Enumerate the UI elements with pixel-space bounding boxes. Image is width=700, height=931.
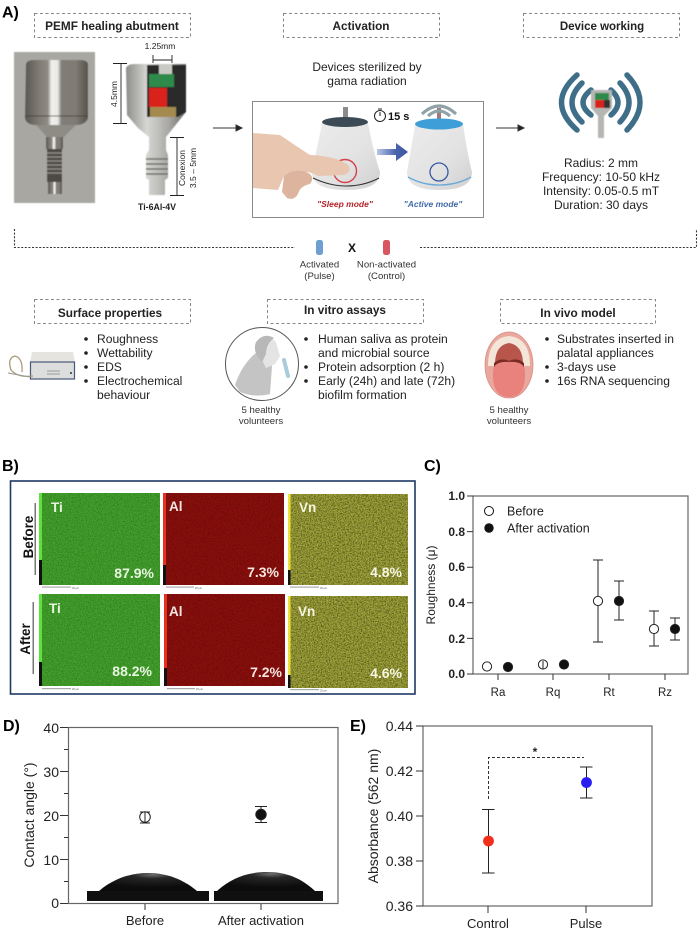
icon: process arrow [377, 143, 408, 161]
diagram: abutment cross-section with dimensions: 1.25mm [145, 41, 175, 51]
x axis labels [126, 913, 304, 928]
icon: non-activated device [383, 240, 390, 255]
map: Ti after: 88.2% [112, 663, 153, 679]
chart: absorbance [365, 718, 652, 931]
section label B: B) [2, 458, 19, 475]
label: in vivo volunteers [487, 405, 531, 427]
heading: Device working [524, 14, 680, 38]
heading: Surface properties [34, 300, 190, 324]
map: Al after [164, 594, 285, 691]
panel: activation illustration [252, 102, 484, 218]
section label E: E) [350, 718, 366, 735]
y axis ticks: 0.40 [386, 808, 413, 824]
x axis labels: Rq [546, 687, 560, 699]
label: in vitro volunteers: 5 healthy [242, 405, 281, 416]
map: Vn before: 4.8% [370, 564, 403, 580]
y axis ticks: 30 [43, 764, 59, 780]
label: in vivo volunteers: volunteers [487, 416, 531, 427]
y axis ticks: 40 [43, 720, 59, 736]
chart: contact angle [21, 720, 338, 928]
y axis ticks: 0.0 [448, 667, 465, 681]
label: after row [18, 602, 34, 674]
map: Vn after [288, 596, 408, 692]
label: activated: (Pulse) [304, 271, 335, 282]
error bars and points [482, 560, 680, 672]
y axis ticks: 0.44 [386, 718, 413, 734]
label: in vivo volunteers: 5 healthy [490, 405, 529, 416]
heading: In vivo model: In vivo model [540, 306, 616, 320]
y axis ticks: 0.4 [448, 596, 465, 610]
text: device parameters: Duration: 30 days [554, 198, 648, 212]
heading: Activation [284, 14, 440, 38]
significance bracket [488, 745, 584, 799]
x axis labels: Rz [658, 687, 672, 699]
label: activated [300, 260, 339, 282]
list: surface properties: Wettability [97, 346, 154, 360]
y axis ticks: 0.36 [386, 898, 413, 914]
text: device parameters: Intensity: 0.05-0.5 mT [543, 184, 660, 198]
label: sleep mode: "Sleep mode" [317, 199, 374, 209]
x axis labels: Pulse [570, 916, 602, 931]
heading: PEMF healing abutment: PEMF healing abutment [45, 19, 179, 33]
icon: open mouth [485, 332, 533, 398]
text: sterilization note [312, 60, 422, 88]
list: in vitro assays: Early (24h) and late (72h) [318, 374, 455, 388]
diagram: abutment cross-section with dimensions: 3.5 – 5mm [188, 148, 198, 188]
icon: device emitting waves [562, 75, 640, 138]
list: in vivo model: palatal appliances [557, 346, 654, 360]
label: before row: Before [21, 515, 36, 558]
heading: Activation: Activation [332, 19, 390, 33]
icon: volunteer collecting saliva [226, 328, 298, 400]
map: Ti before: 87.9% [114, 565, 155, 581]
list: surface properties: EDS [97, 360, 122, 374]
droplet image: after activation [214, 872, 323, 901]
y axis ticks [386, 718, 413, 914]
text: device parameters: Radius: 2 mm [564, 156, 638, 170]
list: surface properties: Electrochemical [97, 374, 182, 388]
map: Ti before [39, 493, 160, 590]
map: Vn after: Vn [298, 604, 315, 619]
legend: Before [507, 504, 544, 518]
label: non-activated: Non-activated [357, 260, 416, 270]
heading: In vitro assays: In vitro assays [304, 303, 386, 317]
pulse point [580, 767, 592, 798]
label: non-activated [357, 260, 416, 282]
map: Al before: Al [169, 499, 182, 514]
arrow: abutment to activation [213, 125, 242, 131]
map: Ti after: 25 µm [72, 688, 79, 691]
map: Al after: Al [169, 604, 182, 619]
x axis labels [467, 916, 602, 931]
x axis labels [491, 687, 672, 699]
map: Ti after [39, 594, 160, 691]
y axis ticks: 0.2 [448, 632, 465, 646]
timer label: 15 s [388, 111, 409, 123]
y axis ticks: 20 [43, 808, 59, 824]
label: non-activated: (Control) [368, 271, 405, 282]
x axis labels: Control [467, 916, 509, 931]
y axis ticks: 1.0 [448, 489, 465, 503]
map: Vn after: 4.6% [370, 665, 403, 681]
y axis ticks [448, 489, 465, 681]
icon: surface analysis instrument [8, 352, 75, 379]
list: in vitro assays [304, 332, 455, 402]
heading: Surface properties: Surface properties [58, 306, 163, 320]
map: Ti after: Ti [49, 601, 61, 616]
diagram: abutment cross-section with dimensions: Conexion [177, 150, 187, 186]
icon: active mode device [407, 106, 472, 190]
heading: Device working: Device working [560, 21, 644, 33]
versus mark: X [348, 241, 356, 255]
y axis ticks [43, 720, 59, 911]
map: Al before: 25 µm [195, 587, 202, 590]
map: Al before [163, 493, 284, 590]
text: sterilization note: gama radiation [327, 74, 407, 88]
y axis ticks: 10 [43, 852, 59, 868]
y axis ticks: 0.42 [386, 763, 413, 779]
map: Vn before: Vn [299, 500, 316, 515]
map: Ti before: 25 µm [72, 587, 79, 590]
heading: In vivo model [500, 300, 656, 324]
list: in vivo model: 3-days use [557, 360, 616, 374]
legend [484, 504, 590, 536]
legend: After activation [507, 522, 590, 536]
timer label [374, 109, 409, 123]
list: surface properties [84, 332, 182, 402]
text: device parameters [542, 156, 660, 212]
control point [482, 810, 494, 873]
x axis labels: After activation [218, 913, 304, 928]
text: device parameters: Frequency: 10-50 kHz [542, 170, 660, 184]
map: Vn after: 25 µm [320, 690, 327, 692]
label: after row: After [18, 623, 33, 655]
map: Vn before: 25 µm [320, 587, 327, 590]
significance bracket: * [533, 745, 538, 759]
map: Al after: 25 µm [196, 688, 203, 691]
chart: roughness [424, 489, 688, 699]
label: before row [21, 503, 36, 575]
label: in vitro volunteers: volunteers [239, 416, 283, 427]
heading: In vitro assays [268, 300, 424, 324]
dotted divider [14, 229, 696, 248]
list: in vivo model [545, 332, 674, 388]
diagram: abutment cross-section with dimensions: 4.5mm [109, 81, 119, 107]
icon: sleep mode device [312, 107, 380, 190]
list: in vitro assays: biofilm formation [318, 388, 407, 402]
map: Vn before [288, 494, 408, 590]
icon: activated device [316, 240, 323, 255]
label: activated: Activated [300, 260, 339, 270]
y axis title: Contact angle (°) [21, 762, 37, 868]
list: in vitro assays: Protein adsorption (2 h) [318, 360, 444, 374]
list: in vitro assays: and microbial source [318, 346, 430, 360]
diagram: abutment cross-section with dimensions [109, 41, 198, 212]
y axis title: Roughness (μ) [424, 546, 438, 624]
arrow: activation to device working [496, 125, 524, 131]
list: surface properties: Roughness [97, 332, 158, 346]
label: active mode: "Active mode" [404, 199, 463, 209]
x axis labels: Before [126, 913, 164, 928]
heading: PEMF healing abutment [34, 14, 190, 38]
photo: healing abutment [14, 52, 95, 203]
diagram: abutment cross-section with dimensions: Ti-6Al-4V [138, 202, 176, 212]
x axis labels: Rt [603, 687, 616, 699]
map: Al after: 7.2% [250, 664, 283, 680]
list: in vitro assays: Human saliva as protein [318, 332, 448, 346]
text: sterilization note: Devices sterilized by [312, 60, 422, 74]
label: in vitro volunteers [239, 405, 283, 427]
icon: finger pressing button [253, 133, 350, 199]
list: surface properties: behaviour [97, 388, 150, 402]
list: in vivo model: 16s RNA sequencing [557, 374, 670, 388]
panel: EDS element maps [10, 481, 415, 694]
droplet image: before [87, 873, 209, 901]
map: Ti before: Ti [51, 500, 63, 515]
x axis labels: Ra [491, 687, 506, 699]
y axis ticks: 0 [51, 895, 59, 911]
map: Al before: 7.3% [247, 564, 280, 580]
data points [140, 806, 267, 823]
y axis ticks: 0.8 [448, 525, 465, 539]
y axis ticks: 0.38 [386, 853, 413, 869]
section label D: D) [3, 718, 20, 735]
list: in vivo model: Substrates inserted in [557, 332, 674, 346]
y axis ticks: 0.6 [448, 560, 465, 574]
y axis title: Absorbance (562 nm) [365, 749, 381, 883]
section label A: A) [2, 4, 19, 22]
section label C: C) [424, 458, 441, 475]
